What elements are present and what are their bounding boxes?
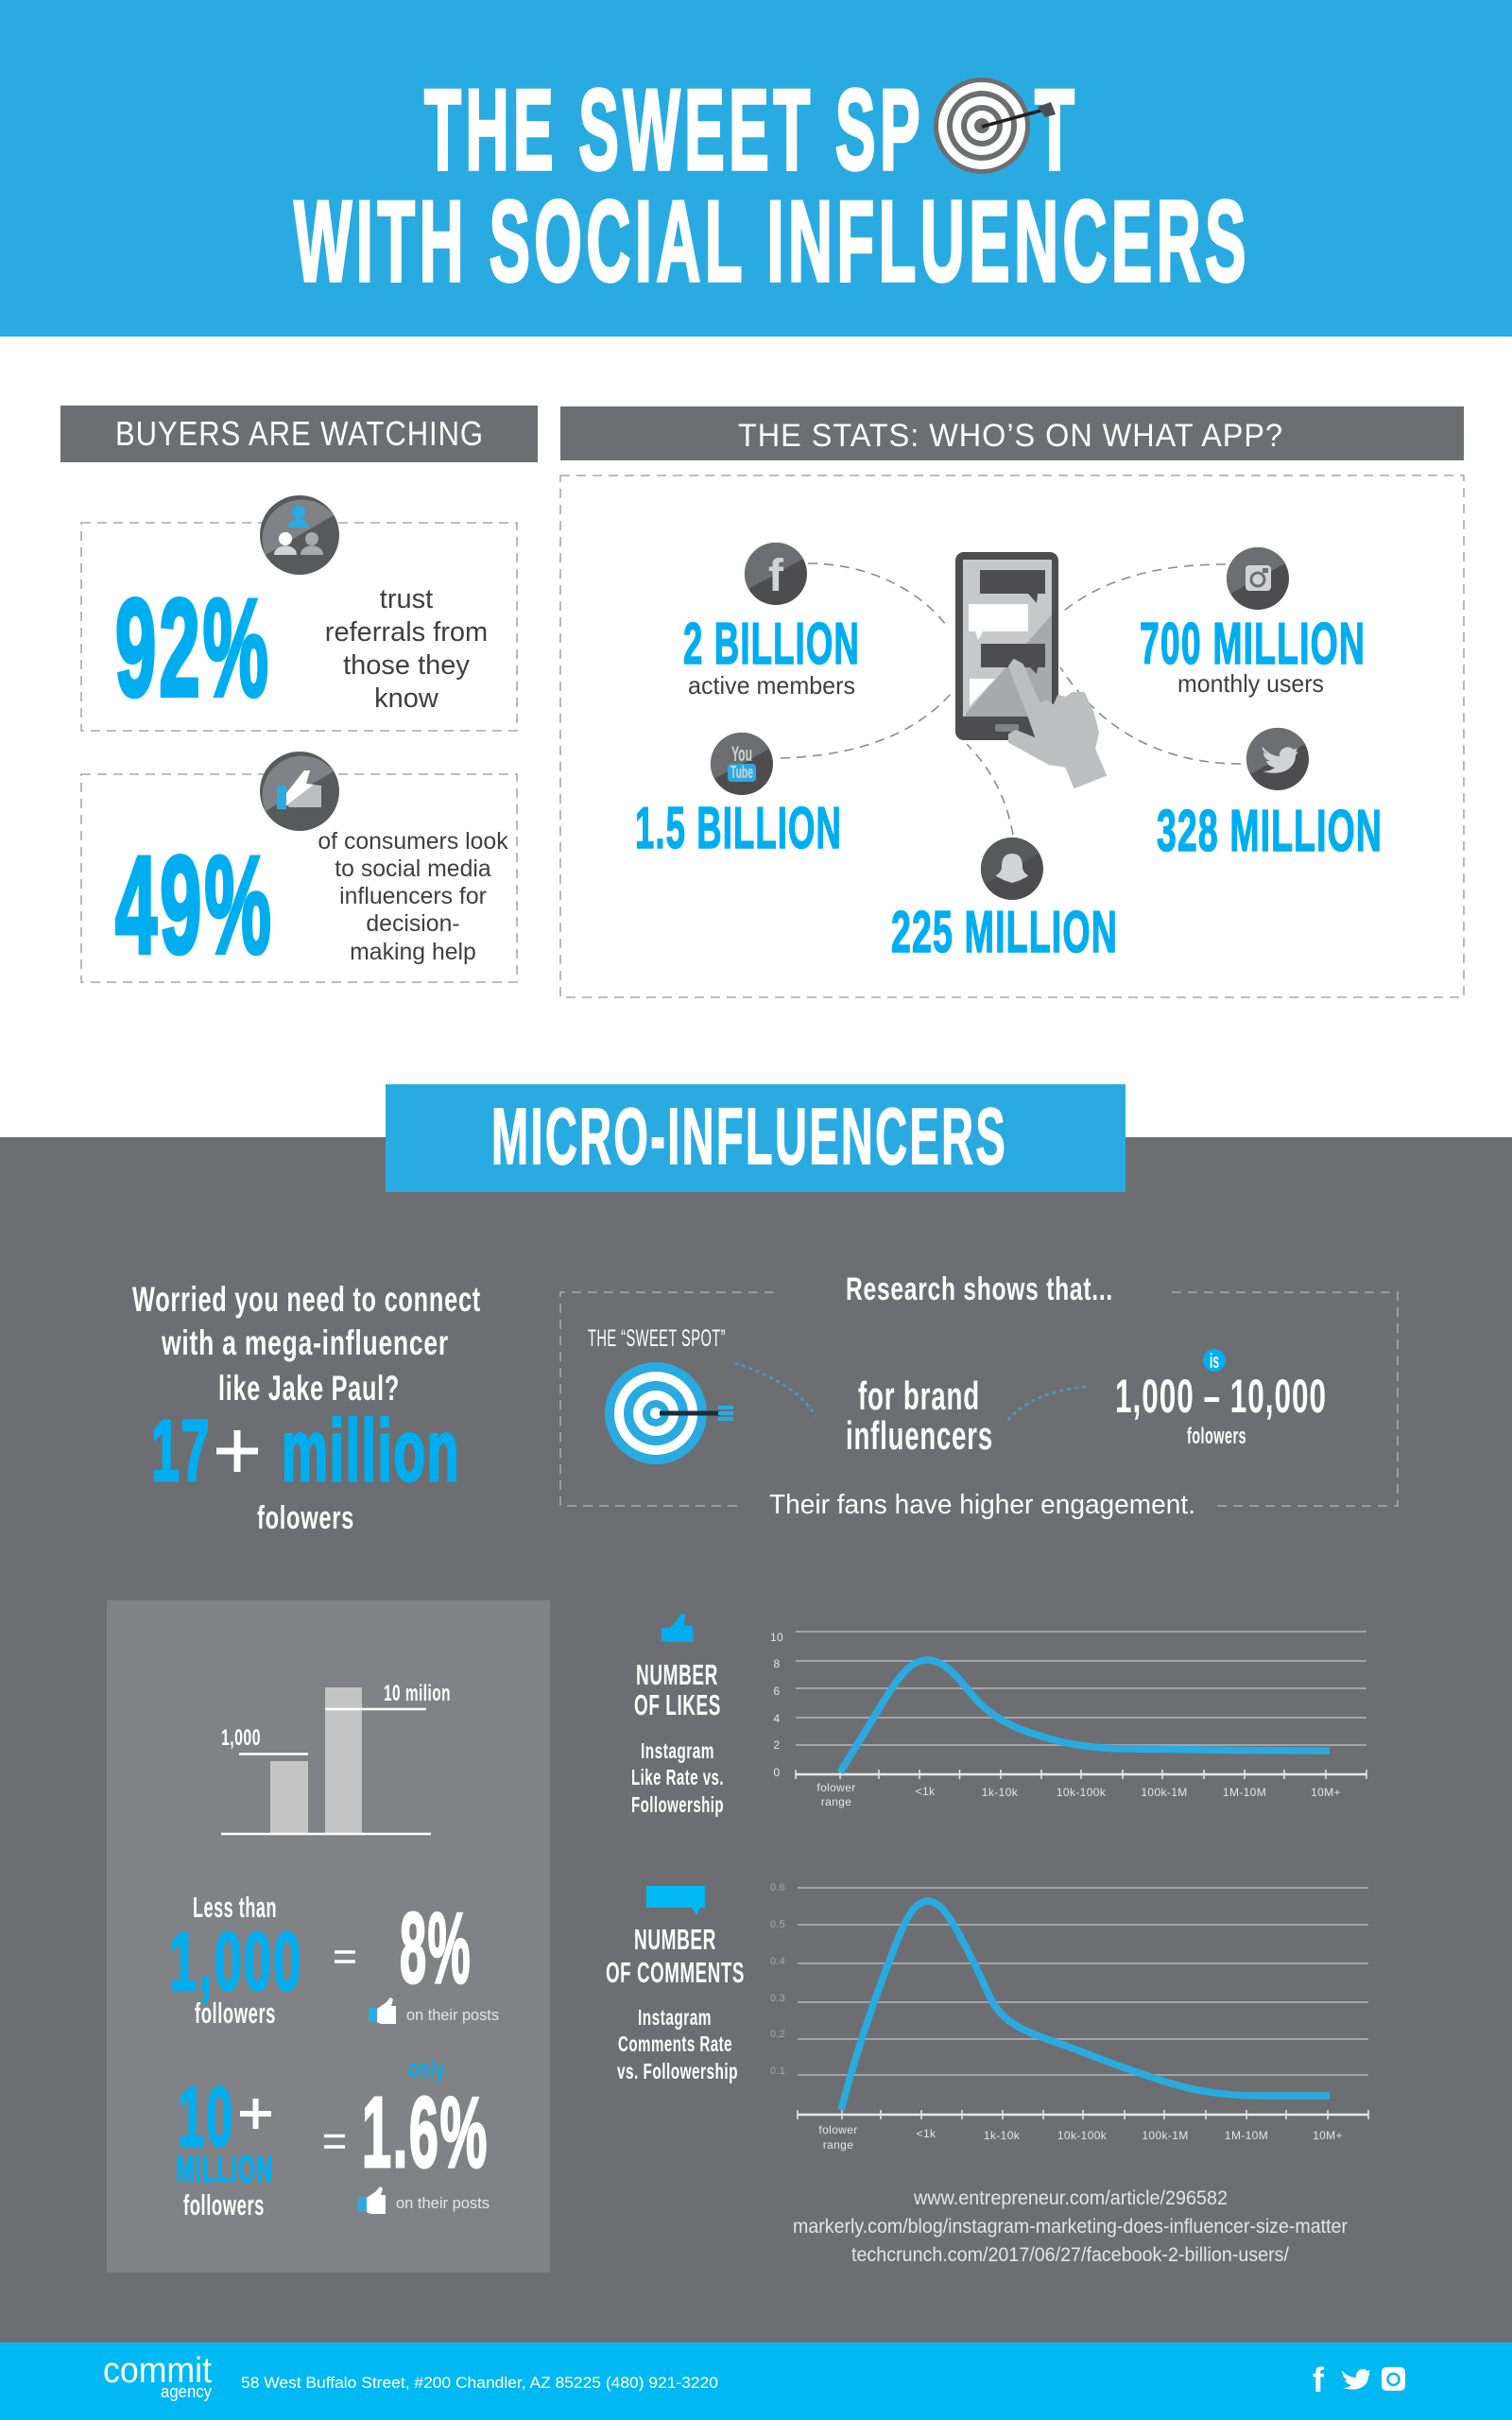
stat row: 10+ million followers: followers (183, 2188, 265, 2221)
heading: the stats: THE STATS: WHO’S ON WHAT APP? (738, 418, 1283, 454)
text: follower range: folowers (1187, 1424, 1246, 1449)
text: trust referrals: referrals from (325, 617, 488, 648)
social icons (1313, 2360, 1405, 2399)
line chart: comments: folower (818, 2123, 858, 2136)
stat: youtube: Tube (730, 763, 753, 782)
sources: markerly.com/blog/instagram-marketing-does-influencer-size-matter (793, 2216, 1348, 2238)
caption: likes (631, 1658, 724, 1817)
address: 58 West Buffalo Street, #200 Chandler, AZ 85225 (480) 921-3220 (241, 2374, 718, 2392)
text block: mega-influencer (132, 1280, 481, 1536)
line chart: comments: <1k (917, 2127, 936, 2140)
line chart: comments: 100k-1M (1142, 2129, 1189, 2142)
line chart: comments: 1k-10k (984, 2129, 1021, 2142)
stat: facebook: active members (688, 671, 855, 700)
badge: is (1203, 1349, 1226, 1373)
stat row: 10+ million followers: MILLION (176, 2149, 273, 2190)
stat row: 10+ million followers: on their posts (396, 2195, 490, 2212)
title (294, 65, 1250, 305)
heading: the stats (560, 406, 1464, 460)
dotted connectors (734, 1363, 1086, 1421)
stat: snapchat (891, 838, 1118, 965)
text: for brand influencers: for brand (858, 1374, 980, 1418)
section: micro-influencers background (0, 1137, 1512, 2342)
stat: snapchat: 225 MILLION (891, 900, 1118, 965)
icon: phone and hand (955, 552, 1106, 787)
caption: likes: Instagram (641, 1738, 714, 1763)
title: T (1035, 65, 1074, 194)
caption: comments (606, 1923, 745, 2083)
chart block: number of comments (606, 1882, 1368, 2152)
icon: people (260, 495, 339, 575)
text: for brand influencers: influencers (846, 1413, 993, 1458)
bar chart: followers (221, 1681, 451, 1834)
sources: techcrunch.com/2017/06/27/facebook-2-billion-users/ (851, 2244, 1289, 2266)
line chart: likes: range (821, 1795, 851, 1808)
logo: commit agency: commit (103, 2351, 212, 2391)
stat: facebook: f (768, 551, 784, 601)
text: for brand influencers (846, 1374, 993, 1458)
badge: is: is (1210, 1349, 1219, 1373)
line chart: likes: 1M-10M (1223, 1786, 1266, 1799)
stat row: 10+ million followers: only (408, 2054, 445, 2083)
stat row: less than 1,000 followers: followers (195, 1996, 276, 2030)
logo: commit agency: agency (161, 2382, 212, 2401)
text block: mega-influencer: with a mega-influencer (161, 1323, 449, 1362)
stat: youtube: You (731, 742, 752, 766)
chart block: number of likes (631, 1614, 1366, 1817)
icon: blue thumb (662, 1614, 694, 1642)
banner: micro-influencers: MICRO-INFLUENCERS (491, 1092, 1007, 1181)
line chart: comments: 10M+ (1313, 2129, 1343, 2142)
text: consumers look (318, 829, 508, 965)
icon: small thumb (358, 2187, 386, 2214)
stat: youtube (635, 733, 842, 861)
line chart: comments: 0.3 (770, 1993, 785, 2004)
panel: research shows (560, 1271, 1398, 1520)
connector lines (781, 563, 1241, 835)
line chart: likes: <1k (916, 1785, 936, 1798)
line chart: comments (770, 1882, 1368, 2152)
line chart: comments: 10k-100k (1057, 2129, 1108, 2142)
text block: mega-influencer: like Jake Paul? (218, 1369, 400, 1408)
text: consumers look: making help (350, 940, 476, 965)
icon: thumbs up (260, 752, 339, 831)
stat row: 10+ million followers: 10 (178, 2070, 234, 2165)
line chart: likes: 6 (773, 1685, 781, 1698)
text: consumers look: influencers for (339, 884, 487, 909)
panel: buyers are watching (60, 406, 538, 982)
line chart: likes: 1k-10k (982, 1786, 1019, 1799)
caption: comments: OF COMMENTS (606, 1956, 745, 1989)
line chart: likes: 2 (773, 1738, 781, 1752)
bar chart: followers: 10 milion (384, 1681, 451, 1706)
caption: likes: Like Rate vs. (631, 1765, 724, 1789)
line chart: comments: range (823, 2138, 853, 2152)
label: the sweet spot: THE “SWEET SPOT” (588, 1325, 726, 1352)
stat: facebook: 2 BILLION (683, 612, 860, 677)
stat: instagram (1140, 547, 1366, 698)
icon: target (605, 1362, 733, 1464)
stat row: less than 1,000 followers: 1,000 (169, 1914, 302, 2008)
icon: speech bubble (646, 1886, 705, 1915)
line chart: likes: 10k-100k (1057, 1786, 1107, 1799)
stat card: 49 percent (81, 752, 517, 982)
stat: facebook (683, 543, 860, 700)
line chart: likes: 10 (770, 1631, 783, 1644)
text: trust referrals: those they (343, 650, 470, 681)
stat row: less than 1,000 followers (169, 1891, 499, 2030)
stat: youtube: 1.5 BILLION (635, 796, 842, 861)
caption: likes: OF LIKES (634, 1688, 721, 1721)
text block: mega-influencer: Worried you need to connect (132, 1280, 481, 1319)
footer (0, 2342, 1512, 2420)
stat: twitter (1157, 728, 1383, 864)
stat row: 10+ million followers (176, 2054, 490, 2221)
heading: buyers are watching (60, 406, 538, 462)
caption: comments: NUMBER (634, 1923, 716, 1956)
caption: comments: vs. Followership (617, 2059, 738, 2083)
line chart: likes: 100k-1M (1141, 1786, 1188, 1799)
text: consumers look: to social media (335, 856, 491, 882)
text: follower range: 1,000 – 10,000 (1115, 1370, 1327, 1423)
line chart: comments: 0.2 (770, 2029, 785, 2040)
text: follower range (1115, 1370, 1327, 1449)
stat row: less than 1,000 followers: 8% (400, 1893, 472, 2004)
caption: likes: Followership (631, 1792, 724, 1817)
line chart: likes: 10M+ (1311, 1786, 1341, 1799)
stat row: less than 1,000 followers: Less than (193, 1891, 277, 1924)
line chart: comments: 1M-10M (1225, 2129, 1268, 2142)
stat: instagram: monthly users (1177, 669, 1324, 698)
bar chart: followers: 1,000 (221, 1725, 261, 1751)
header banner (0, 0, 1512, 337)
stat row: less than 1,000 followers: on their posts (406, 2007, 499, 2024)
line chart: likes: 8 (773, 1657, 781, 1670)
caption: comments: Instagram (638, 2005, 712, 2030)
line chart: comments: 0.1 (770, 2066, 785, 2077)
panel: likes comparison (107, 1600, 550, 2273)
stat row: 10+ million followers: 1.6% (362, 2077, 489, 2188)
line chart: comments: 0.6 (770, 1882, 785, 1893)
social icons: f (1313, 2360, 1325, 2399)
text: consumers look: decision- (366, 911, 460, 937)
line chart: likes: 0 (773, 1766, 781, 1779)
sources: www.entrepreneur.com/article/296582 (913, 2187, 1228, 2209)
text: higher engagement: Their fans have higher engagement. (769, 1490, 1195, 1520)
stat card: 92 percent (81, 495, 517, 731)
title: THE SWEET SP (424, 65, 924, 194)
caption: likes: NUMBER (636, 1658, 718, 1691)
text: trust referrals: trust (380, 584, 433, 614)
statistic: 92%: 92% (115, 571, 271, 724)
line chart: comments: 0.4 (770, 1956, 785, 1967)
line chart: likes: folower (816, 1781, 856, 1794)
heading: research shows that: Research shows that... (846, 1271, 1113, 1307)
panel: who's on what app (560, 406, 1464, 997)
statistic: 49%: 49% (115, 828, 274, 981)
text: consumers look: of consumers look (318, 829, 508, 855)
text: trust referrals (325, 584, 488, 714)
line chart: likes (770, 1631, 1366, 1808)
text block: mega-influencer: folowers (257, 1500, 354, 1536)
heading: buyers are watching: BUYERS ARE WATCHING (115, 414, 484, 453)
sources (793, 2187, 1348, 2266)
banner: micro-influencers (386, 1084, 1125, 1192)
text block: mega-influencer: million (282, 1403, 460, 1499)
stat: instagram: 700 MILLION (1140, 612, 1366, 677)
text: trust referrals: know (374, 683, 439, 714)
text block: mega-influencer: 17 (151, 1403, 211, 1499)
icon: title target (934, 78, 1056, 174)
line chart: comments: 0.5 (770, 1919, 785, 1930)
icon: small thumb (369, 1997, 396, 2024)
caption: comments: Comments Rate (618, 2031, 732, 2056)
line chart: likes: 4 (773, 1712, 781, 1725)
